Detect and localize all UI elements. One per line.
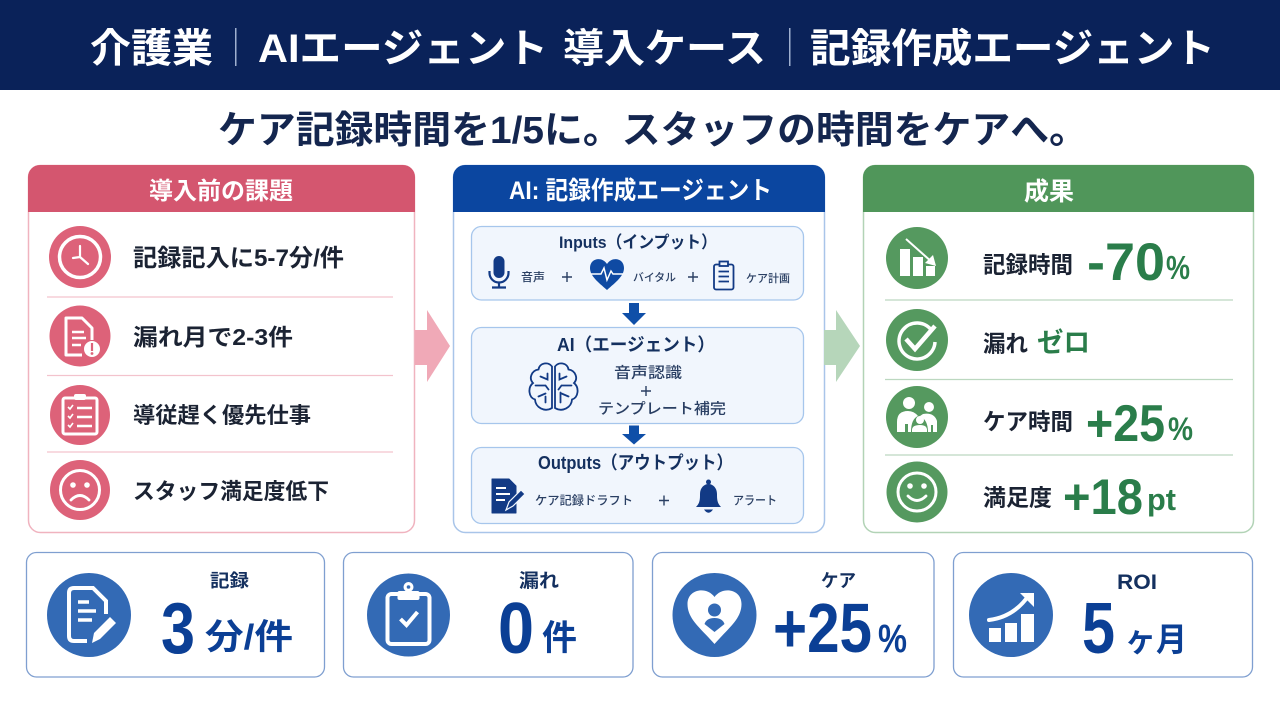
title xyxy=(90,27,1215,71)
label: アラート xyxy=(733,494,777,508)
icon: clipboard check xyxy=(367,574,450,656)
header banner xyxy=(0,0,1280,90)
icon: bell xyxy=(696,480,721,513)
value xyxy=(161,589,293,669)
value: 0 xyxy=(498,589,534,669)
AI description xyxy=(598,364,726,418)
value: % xyxy=(878,617,907,661)
result: satisfaction: +18 xyxy=(1063,469,1143,525)
icon: check circle xyxy=(886,309,948,371)
KPI card: care xyxy=(652,552,934,677)
result: record time: -70 xyxy=(1087,233,1165,292)
icon: document alert xyxy=(50,306,110,366)
result: satisfaction: 満足度 xyxy=(983,484,1052,510)
arrow: inputs to AI xyxy=(622,303,646,325)
value: ヶ月 xyxy=(1125,621,1187,658)
label: 記録 xyxy=(210,571,249,591)
label: ROI xyxy=(1117,571,1157,594)
label: ケア計画 xyxy=(746,271,790,285)
icon: document pen xyxy=(47,573,131,657)
result: care time: +25 xyxy=(1086,395,1165,453)
value: +25 xyxy=(773,589,872,667)
panel: results xyxy=(863,165,1254,532)
result: record time xyxy=(983,233,1190,292)
icon: heart person xyxy=(672,573,756,657)
value xyxy=(1082,589,1187,669)
result: omissions xyxy=(983,327,1090,358)
label: ケア xyxy=(821,571,856,591)
icon: smile xyxy=(886,462,948,522)
title: 記録作成エージェント xyxy=(810,27,1215,71)
result: satisfaction xyxy=(983,469,1176,525)
row text: スタッフ満足度低下 xyxy=(133,479,329,504)
arrow: before to AI xyxy=(415,310,450,382)
icon: microphone xyxy=(490,256,508,288)
label: バイタル xyxy=(633,271,676,284)
icon: family xyxy=(886,386,948,448)
box: AI engine xyxy=(472,328,804,424)
KPI card: omissions xyxy=(344,552,633,677)
icon: falling bar chart xyxy=(886,227,948,289)
panel heading: 導入前の課題 xyxy=(149,178,293,205)
result: record time: % xyxy=(1166,249,1190,286)
box: inputs xyxy=(472,226,804,300)
result: care time: ケア時間 xyxy=(983,408,1073,434)
panel heading: AI: 記録作成エージェント xyxy=(509,177,772,205)
panel: before challenges xyxy=(28,165,415,532)
panel heading: 成果 xyxy=(1024,178,1074,206)
result: care time: % xyxy=(1168,411,1193,447)
outputs heading: Outputs（アウトプット） xyxy=(538,453,733,473)
icon: clipboard xyxy=(714,262,734,290)
icon: document pen xyxy=(492,479,525,513)
icon: rising chart xyxy=(969,573,1053,657)
box: outputs xyxy=(472,448,804,524)
icon: heart pulse xyxy=(590,259,624,290)
result: satisfaction: pt xyxy=(1147,482,1176,517)
value: 3 xyxy=(161,589,195,669)
plus xyxy=(659,496,669,506)
KPI card: ROI xyxy=(954,552,1252,677)
icon: clock xyxy=(49,226,111,288)
result: omissions: ゼロ xyxy=(1037,327,1090,358)
AI description: テンプレート補完 xyxy=(598,400,726,418)
label: 音声 xyxy=(521,270,545,284)
label: 漏れ xyxy=(519,570,559,592)
plus xyxy=(562,272,698,282)
value: 件 xyxy=(542,619,577,658)
headline: ケア記録時間を1/5に。スタッフの時間をケアへ。 xyxy=(218,110,1088,152)
label: ケア記録ドラフト xyxy=(535,492,633,508)
title: 介護業 xyxy=(90,27,213,71)
value: 5 xyxy=(1082,589,1115,669)
AI heading: AI（エージェント） xyxy=(557,335,715,355)
title: 導入ケース xyxy=(563,27,766,71)
row text: 漏れ月で2-3件 xyxy=(133,324,293,350)
arrow: AI to outputs xyxy=(622,426,646,444)
value xyxy=(498,589,577,669)
icon: sad face xyxy=(50,460,110,520)
inputs heading: Inputs（インプット） xyxy=(559,233,717,252)
arrow: AI to results xyxy=(824,310,860,382)
result: omissions: 漏れ xyxy=(983,330,1028,356)
title: AIエージェント xyxy=(258,27,548,71)
AI description: 音声認識 xyxy=(614,364,682,382)
row text: 導従趕く優先仕事 xyxy=(133,403,311,428)
KPI card: record xyxy=(26,552,324,677)
result: record time: 記録時間 xyxy=(983,252,1073,278)
panel: AI agent xyxy=(453,165,825,532)
result: care time xyxy=(983,395,1193,453)
value: 分/件 xyxy=(205,618,293,657)
row text: 記録記入に5-7分/件 xyxy=(133,245,344,272)
icon: brain xyxy=(529,363,578,410)
icon: checklist xyxy=(50,385,110,445)
